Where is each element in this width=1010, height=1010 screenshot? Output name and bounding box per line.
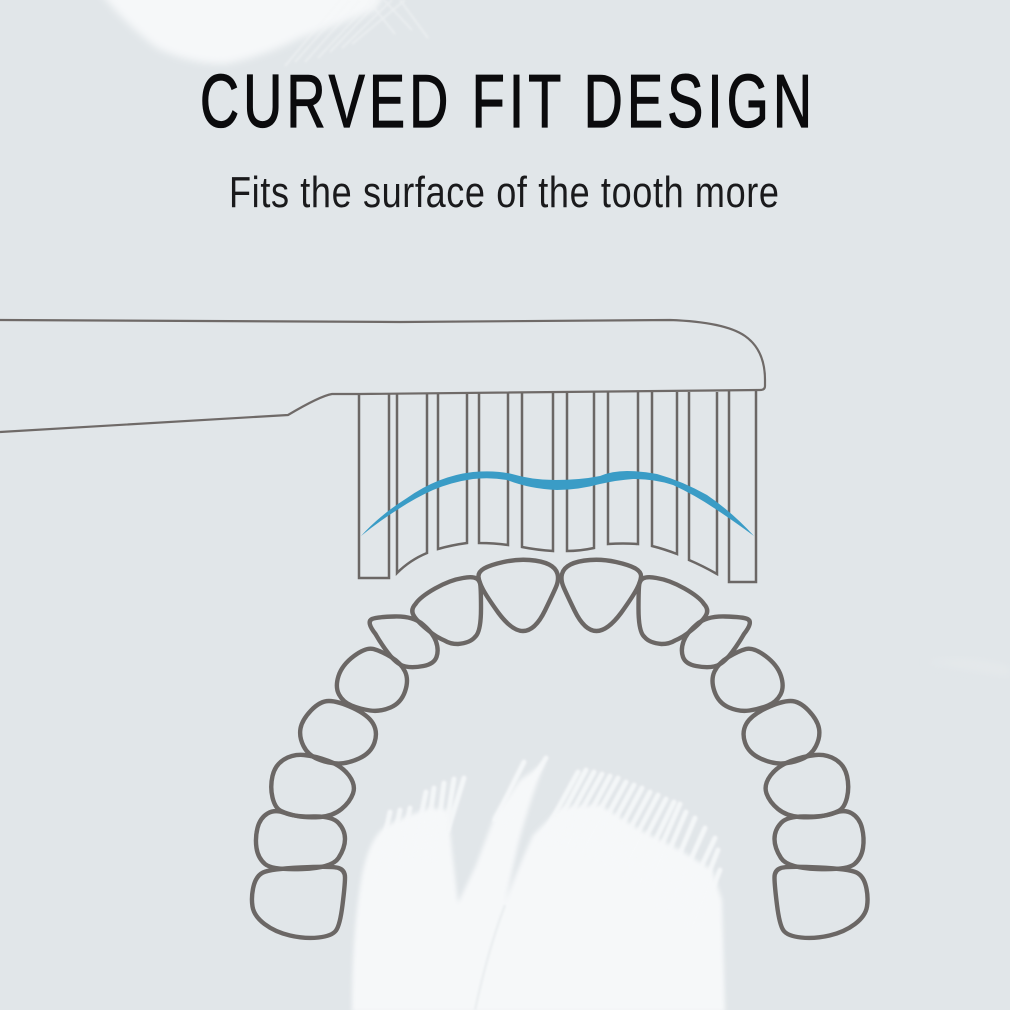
blue curve across bristle tips xyxy=(361,471,754,536)
faint wisp at right edge xyxy=(925,660,1010,676)
left teeth xyxy=(252,560,558,938)
right teeth xyxy=(562,560,868,938)
subtitle: Fits the surface of the tooth more xyxy=(229,168,779,217)
brush seam line xyxy=(475,905,505,1010)
toothbrush head and handle outline xyxy=(0,320,765,432)
top white bristle blur xyxy=(100,0,428,66)
title: CURVED FIT DESIGN xyxy=(200,59,812,143)
teeth arch xyxy=(252,560,868,938)
bottom white brush head xyxy=(352,758,725,1010)
bristles xyxy=(359,391,756,582)
